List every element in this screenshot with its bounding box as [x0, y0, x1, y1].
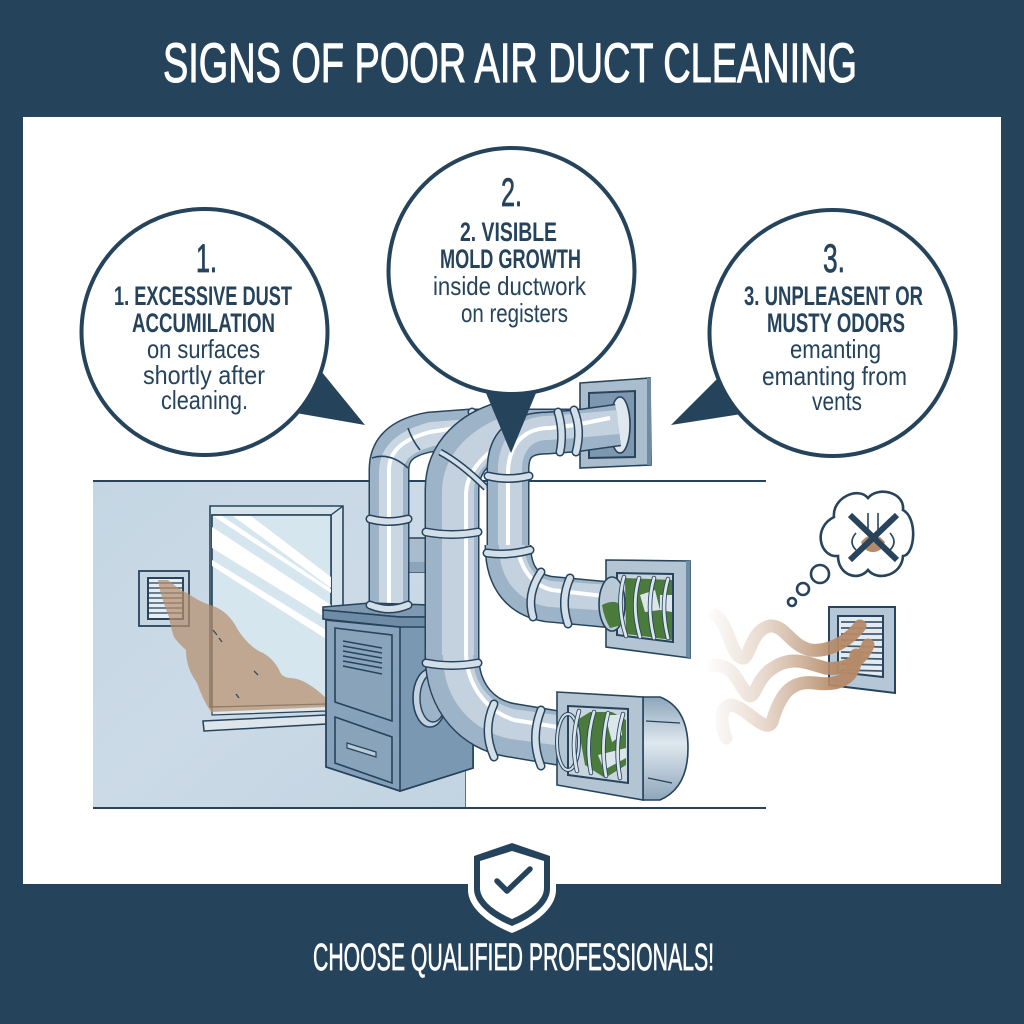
mid register duct mouth and slats — [599, 577, 668, 638]
callout 3: musty odors: emanting from — [762, 361, 907, 391]
footer call to action: CHOOSE QUALIFIED PROFESSIONALS! — [313, 937, 714, 979]
window with sunlight — [203, 506, 343, 731]
callout 3: musty odors: MUSTY ODORS — [767, 308, 905, 338]
callout 2: visible mold: 2. VISIBLE — [460, 217, 557, 247]
top right register — [580, 378, 651, 468]
furnace unit — [323, 603, 473, 791]
callout 2: visible mold: inside ductwork — [433, 271, 587, 301]
callout 1: excessive dust: ACCUMILATION — [132, 308, 275, 338]
callout 1: excessive dust: 1. EXCESSIVE DUST — [114, 281, 292, 311]
callout 1: excessive dust: shortly after — [143, 360, 265, 390]
callout 1: excessive dust — [82, 209, 365, 455]
white illustration panel — [23, 117, 1001, 884]
right wall vent — [829, 607, 895, 693]
rear duct — [370, 412, 585, 605]
callout 3: musty odors: vents — [812, 386, 862, 416]
bottom register with mold and round outlet — [488, 692, 688, 800]
callout 1: excessive dust: 1. — [196, 237, 217, 281]
callout 2: visible mold: on registers — [461, 298, 568, 328]
callout 3: musty odors — [671, 210, 956, 456]
callout 2: visible mold: MOLD GROWTH — [440, 244, 581, 274]
callout 2: visible mold: 2. — [501, 171, 522, 215]
left wall vent — [139, 571, 189, 626]
callout 2: visible mold — [388, 148, 634, 453]
room wall — [93, 482, 465, 807]
room lines — [93, 481, 766, 808]
side stub behind ducts — [393, 538, 427, 572]
dust accumulation plume — [158, 580, 326, 712]
right duct — [488, 410, 618, 560]
thought cloud with crossed nose — [788, 492, 913, 606]
callout 1: excessive dust: cleaning. — [161, 385, 248, 415]
lower main duct to bottom register — [426, 655, 570, 740]
callout 3: musty odors: emanting — [790, 334, 881, 364]
mid register with mold — [606, 560, 690, 658]
shield check icon — [468, 836, 556, 933]
callout 3: musty odors: 3. — [823, 237, 845, 281]
lower right duct to mid register — [487, 545, 612, 624]
ring behind main duct — [413, 669, 447, 727]
odor waves — [712, 615, 868, 738]
callout 3: musty odors: 3. UNPLEASENT OR — [744, 281, 923, 311]
center duct — [426, 420, 530, 660]
callout 1: excessive dust: on surfaces — [147, 334, 260, 364]
